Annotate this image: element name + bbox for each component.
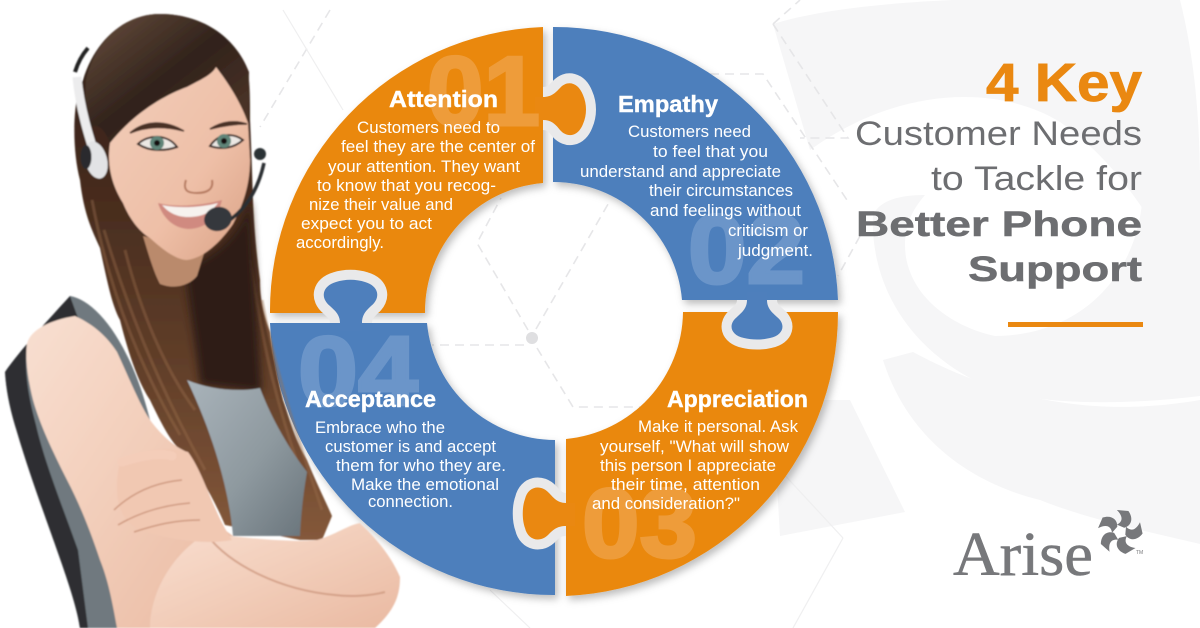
title line: Support: Support (968, 250, 1142, 289)
background hexagon lines (260, 0, 860, 407)
logo swirl icon (1098, 510, 1144, 556)
panel: attention quadrant (270, 27, 543, 313)
body text: Customers need (628, 123, 751, 141)
puzzle ring (270, 27, 838, 596)
puzzle tab: blue into appreciation (732, 292, 782, 340)
heading: Empathy (618, 91, 718, 117)
socket halo: empathy (535, 83, 586, 135)
body text: and feelings without (650, 202, 801, 220)
number 04: 04 (298, 316, 418, 426)
text: appreciation (592, 386, 808, 513)
trademark: TM (1136, 550, 1143, 556)
body text: them for who they are. (336, 457, 506, 475)
nose (185, 180, 212, 193)
body text (296, 119, 535, 252)
hub dot (526, 332, 538, 344)
text: empathy (580, 91, 813, 260)
body text: Make it personal. Ask (638, 418, 799, 436)
background swirl (772, 0, 1200, 544)
body text: Make the emotional (351, 476, 499, 494)
body text: this person I appreciate (600, 457, 776, 475)
logo wordmark: Arise (953, 521, 1093, 589)
body text: their circumstances (649, 182, 793, 200)
socket halo: appreciation (732, 292, 782, 340)
heading: Attention (389, 86, 498, 112)
body text: understand and appreciate (580, 163, 781, 181)
number 01: 01 (427, 36, 540, 146)
body text: judgment. (737, 242, 813, 260)
hair (74, 14, 332, 540)
body text: customer is and accept (325, 438, 496, 456)
title line: to Tackle for: to Tackle for (931, 160, 1142, 198)
puzzle tab: orange into acceptance (523, 487, 575, 540)
body text: to know that you recog- (317, 177, 496, 195)
eyebrows (130, 122, 247, 133)
body text: to feel that you (653, 143, 768, 161)
arm crease (207, 535, 385, 596)
body text: their time, attention (611, 476, 760, 494)
text: attention (296, 86, 535, 252)
socket halo: acceptance (523, 487, 575, 540)
face (109, 67, 250, 260)
body text: Embrace who the (315, 419, 445, 437)
body text: accordingly. (296, 234, 384, 252)
body text: expect you to act (301, 215, 432, 233)
panel: appreciation quadrant (566, 312, 838, 596)
eyes (138, 134, 243, 150)
logo: Arise (953, 510, 1144, 589)
title (855, 53, 1142, 289)
hand and fingers (114, 449, 232, 542)
heading: Appreciation (667, 386, 808, 412)
number 02: 02 (688, 194, 805, 304)
hair strands (92, 200, 322, 510)
mouth (158, 200, 222, 229)
title rule (1008, 322, 1143, 327)
number 03: 03 (582, 468, 697, 578)
left arm and shoulder (26, 316, 233, 628)
dark hair beneath chin (185, 200, 262, 392)
background thin lines (283, 10, 843, 628)
hair crown (84, 14, 249, 143)
body text: connection. (368, 493, 453, 511)
forearm (150, 523, 400, 628)
body text: Customers need to (357, 119, 500, 137)
dress back (5, 296, 170, 628)
dress front (187, 380, 307, 536)
neck (143, 236, 205, 287)
body text (592, 418, 799, 513)
heading: Acceptance (305, 386, 436, 412)
title line: Better Phone: Better Phone (856, 205, 1142, 244)
puzzle tab: orange into empathy (535, 83, 586, 135)
body text: nize their value and (309, 196, 453, 214)
text: acceptance (305, 386, 506, 511)
title line: Customer Needs: Customer Needs (855, 115, 1142, 153)
headset (75, 48, 266, 234)
title line: 4 Key: 4 Key (986, 53, 1142, 113)
body text: feel they are the center of (341, 138, 535, 156)
photo illustration: woman with headset (5, 14, 400, 628)
body text (580, 123, 813, 260)
body text: yourself, "What will show (600, 438, 789, 456)
dress dark edge (5, 296, 88, 628)
socket halo: attention (324, 280, 377, 331)
numerals (298, 36, 805, 578)
body text (315, 419, 506, 511)
puzzle tab: blue into attention (324, 280, 377, 331)
body text: your attention. They want (328, 158, 520, 176)
panel: acceptance quadrant (270, 323, 555, 595)
panel: empathy quadrant (553, 27, 838, 300)
body text: and consideration?" (592, 495, 740, 513)
body text: criticism or (728, 222, 809, 240)
